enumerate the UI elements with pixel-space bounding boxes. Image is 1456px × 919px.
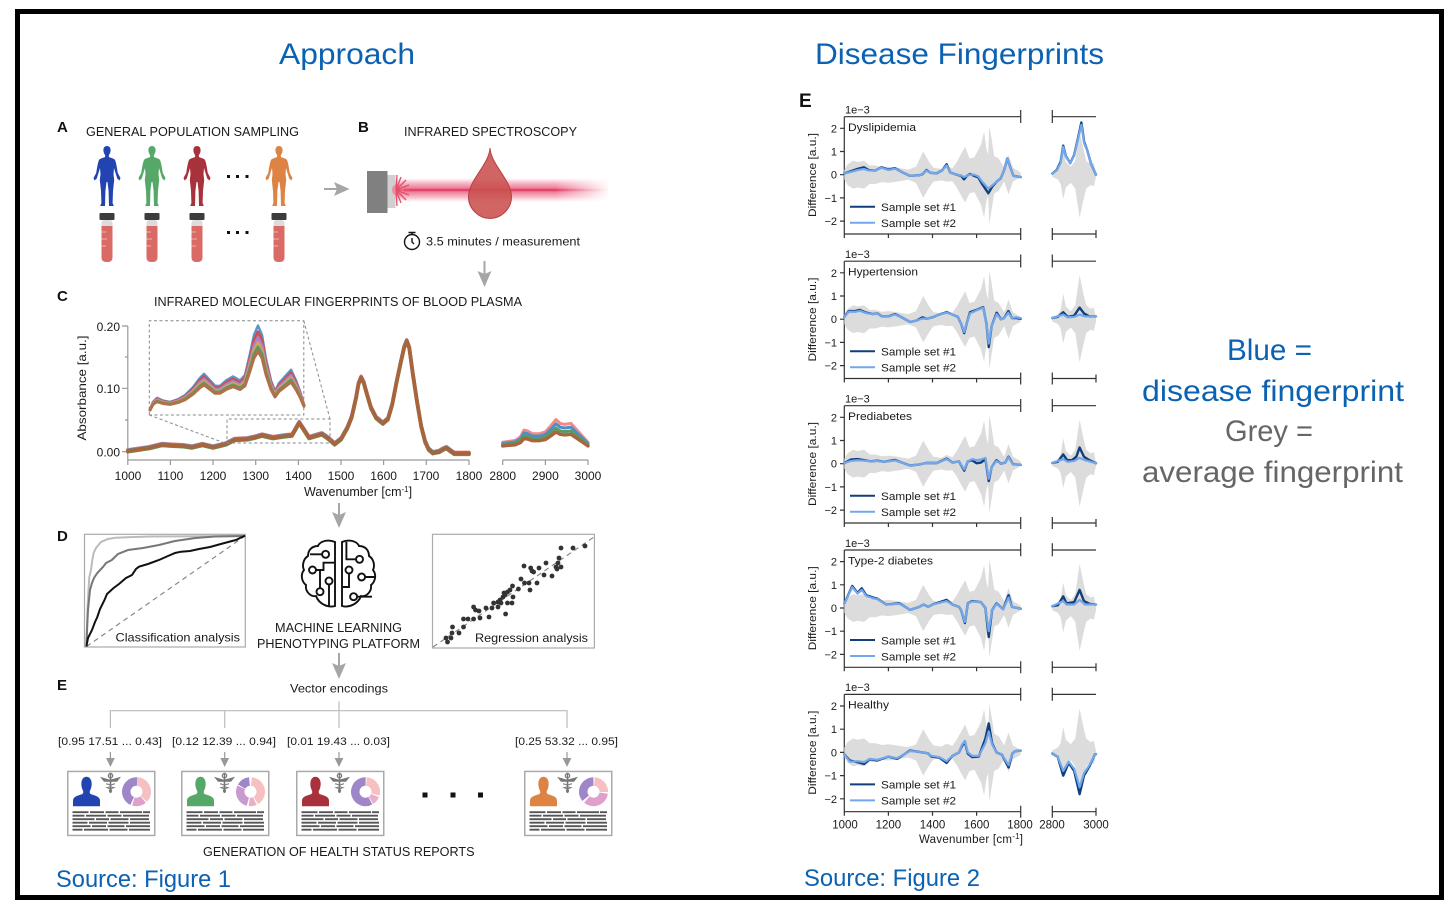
spectrum curves, 1000-1800: [128, 340, 469, 454]
chart: Healthy: 1e−3: [845, 682, 870, 694]
grey meaning: average fingerprint: [1142, 456, 1404, 489]
icon: blood tube 1: [100, 213, 114, 262]
x axis labels, right figure: 3000: [1083, 820, 1109, 832]
chart: Dyslipidemia: 0: [831, 170, 837, 182]
chart: Prediabetes: 0: [831, 459, 837, 471]
heading C: INFRARED MOLECULAR FINGERPRINTS OF BLOOD PLASMA: [154, 295, 523, 309]
panel letter B: B: [358, 119, 369, 136]
panel letter A: A: [57, 119, 68, 136]
icon: blood tube 4: [272, 213, 286, 262]
icon: blood drop: [468, 148, 512, 218]
title: Approach: Approach: [279, 38, 415, 71]
y axis labels: 0.00: [97, 446, 120, 460]
chart: Type-2 diabetes: [807, 538, 1096, 673]
platform label: MACHINE LEARNING: [275, 621, 402, 635]
chart: Prediabetes: 2: [831, 412, 837, 424]
measurement time: 3.5 minutes / measurement: [426, 234, 581, 248]
chart: Prediabetes: −1: [824, 482, 837, 494]
chart: Prediabetes: 1e−3: [845, 394, 870, 406]
x axis title: -1: [401, 485, 409, 494]
icon: laser sparks: [392, 175, 410, 206]
icon: stopwatch: [404, 232, 420, 250]
chart: Type-2 diabetes: 0: [831, 603, 837, 615]
x axis title: ]: [409, 485, 412, 499]
chart: Healthy: −1: [824, 771, 837, 783]
vector values: [0.12 12.39 ... 0.94]: [172, 736, 276, 748]
chart: Prediabetes: −2: [824, 505, 837, 517]
chart: Type-2 diabetes: 1e−3: [845, 538, 870, 550]
title: Disease Fingerprints: Disease Fingerprints: [815, 38, 1104, 71]
chart: Type-2 diabetes: Type-2 diabetes: [848, 555, 934, 567]
chart: Type-2 diabetes: −2: [824, 649, 837, 661]
regression scatter chart: [432, 534, 594, 648]
chart: Healthy: Sample set #2: [881, 796, 956, 808]
chart: Healthy: Healthy: [848, 700, 890, 712]
x axis labels, right figure: 2800: [1039, 820, 1065, 832]
blue label: Blue =: [1227, 334, 1312, 367]
chart: Healthy: −2: [824, 794, 837, 806]
panel E: vector encodings and reports: [57, 677, 618, 859]
x axis labels, right figure: 1000: [832, 820, 858, 832]
x axis labels: 2900: [532, 469, 559, 483]
chart: Type-2 diabetes: 1: [831, 580, 837, 592]
chart: Hypertension: −1: [824, 337, 837, 349]
chart: Prediabetes: [807, 394, 1096, 529]
icon: green person: [138, 146, 166, 206]
vector values: [0.95 17.51 ... 0.43]: [58, 736, 162, 748]
chart: Hypertension: Hypertension: [848, 266, 918, 278]
chart: Healthy: [807, 682, 1096, 818]
continuation dots: [227, 175, 248, 178]
chart: Dyslipidemia: −2: [824, 216, 837, 228]
y axis labels: [97, 320, 120, 460]
chart: Hypertension: −2: [824, 361, 837, 373]
chart: Dyslipidemia: Difference [a.u.]: [807, 133, 819, 217]
small arrows: [106, 752, 571, 767]
heading B: INFRARED SPECTROSCOPY: [404, 125, 578, 139]
continuation dots: [227, 231, 248, 234]
chart: Healthy: 2: [831, 701, 837, 713]
source: figure 1: Source: Figure 1: [56, 866, 231, 893]
panel letter E, right figure: E: [799, 91, 812, 112]
source: figure 2: Source: Figure 2: [804, 865, 980, 892]
chart: Healthy: 0: [831, 747, 837, 759]
panel A: general population sampling: [57, 119, 299, 262]
panel B: infrared spectroscopy: [358, 119, 610, 250]
chart: Hypertension: [807, 249, 1096, 384]
chart: Hypertension: 1e−3: [845, 249, 870, 261]
panel letter C: C: [57, 288, 68, 305]
report card: orange: [525, 771, 612, 835]
x axis title, right figure: -1: [1012, 832, 1020, 841]
blue meaning: disease fingerprint: [1142, 375, 1405, 408]
panel D: machine learning: [57, 528, 594, 651]
icon: orange person: [266, 146, 292, 206]
chart: Dyslipidemia: Sample set #2: [881, 218, 956, 230]
x axis labels: 1200: [200, 469, 227, 483]
platform label: [257, 621, 420, 651]
icon: laser source: [367, 171, 396, 213]
spectrum curves, 2800-3000: [503, 420, 588, 446]
icon: red person: [184, 146, 210, 206]
chart: Prediabetes: Prediabetes: [848, 411, 913, 423]
chart: Type-2 diabetes: Sample set #2: [881, 651, 956, 663]
chart: Hypertension: Sample set #1: [881, 346, 956, 358]
chart: Prediabetes: 1: [831, 436, 837, 448]
chart: Dyslipidemia: 2: [831, 123, 837, 135]
icon: blood tube 2: [144, 213, 160, 262]
x axis title, right figure: ]: [1020, 834, 1023, 846]
chart label: Classification analysis: [116, 630, 240, 644]
x axis labels: 3000: [575, 469, 602, 483]
chart: Dyslipidemia: 1: [831, 146, 837, 158]
chart: Type-2 diabetes: Sample set #1: [881, 635, 956, 647]
x axis labels: 1800: [456, 469, 483, 483]
chart: Dyslipidemia: Sample set #1: [881, 202, 956, 214]
report card: red: [297, 771, 384, 835]
chart: Prediabetes: Difference [a.u.]: [807, 422, 819, 506]
axes: [122, 326, 588, 465]
platform label: PHENOTYPING PLATFORM: [257, 637, 420, 651]
ellipsis between reports: [422, 792, 483, 798]
vector encodings label: Vector encodings: [290, 682, 388, 696]
chart: Type-2 diabetes: 2: [831, 557, 837, 569]
branching tree: [110, 702, 567, 728]
x axis labels, right figure: 1800: [1007, 820, 1033, 832]
chart: Healthy: Sample set #1: [881, 780, 956, 792]
chart: Dyslipidemia: [807, 104, 1096, 240]
panel letter D: D: [57, 528, 68, 545]
x axis labels, right figure: [832, 820, 1109, 832]
chart: Type-2 diabetes: −1: [824, 626, 837, 638]
chart: Prediabetes: Sample set #1: [881, 491, 956, 503]
x axis labels: 1500: [328, 469, 355, 483]
x axis labels: [115, 469, 602, 483]
icon: machine learning brain: [302, 541, 375, 607]
x axis labels: 1700: [413, 469, 440, 483]
heading A: GENERAL POPULATION SAMPLING: [86, 125, 299, 139]
chart: Hypertension: 0: [831, 314, 837, 326]
reports caption: GENERATION OF HEALTH STATUS REPORTS: [203, 845, 474, 859]
x axis labels: 1300: [242, 469, 269, 483]
chart: Dyslipidemia: 1e−3: [845, 104, 870, 116]
vector values: [58, 736, 618, 748]
chart: Dyslipidemia: −1: [824, 193, 837, 205]
legend text block: [1142, 334, 1405, 489]
y axis labels: 0.20: [97, 320, 120, 334]
chart: Dyslipidemia: Dyslipidemia: [848, 122, 917, 134]
chart: Healthy: Difference [a.u.]: [807, 711, 819, 795]
chart: Type-2 diabetes: Difference [a.u.]: [807, 566, 819, 650]
vector values: [0.25 53.32 ... 0.95]: [515, 736, 618, 748]
report card: blue: [68, 771, 155, 835]
x axis title, right figure: Wavenumber [cm: [919, 834, 1012, 846]
x axis labels: 1100: [157, 469, 184, 483]
x axis labels: 2800: [489, 469, 516, 483]
y axis labels: 0.10: [97, 382, 120, 396]
chart: Hypertension: Sample set #2: [881, 362, 956, 374]
icon: blood tube 3: [190, 213, 204, 262]
x axis labels, right figure: 1600: [964, 820, 989, 832]
laser beam: [395, 176, 610, 204]
panel C: molecular fingerprints chart: [57, 288, 602, 499]
chart: Prediabetes: Sample set #2: [881, 507, 956, 519]
panel letter E: E: [57, 677, 67, 694]
chart: Hypertension: Difference [a.u.]: [807, 278, 819, 362]
icon: blue person: [94, 146, 120, 206]
vector values: [0.01 19.43 ... 0.03]: [287, 736, 390, 748]
chart: Hypertension: 1: [831, 291, 837, 303]
x axis labels: 1000: [115, 469, 142, 483]
classification ROC chart: [84, 534, 245, 647]
grey label: Grey =: [1225, 415, 1313, 448]
chart label: Regression analysis: [475, 631, 588, 645]
arrow: D to E: [332, 653, 346, 679]
x axis labels, right figure: 1400: [920, 820, 945, 832]
x axis labels: 1600: [370, 469, 397, 483]
report card: green: [182, 771, 269, 835]
x axis labels: 1400: [285, 469, 312, 483]
arrow: C to D: [332, 503, 346, 528]
arrow: A to B: [324, 182, 350, 196]
chart: Healthy: 1: [831, 724, 837, 736]
inset curves: [150, 326, 304, 410]
x axis labels, right figure: 1200: [876, 820, 901, 832]
chart: Hypertension: 2: [831, 268, 837, 280]
x axis title: Wavenumber [cm: [304, 485, 401, 499]
inset zoom box: [149, 321, 330, 443]
arrow: B to C: [478, 261, 492, 287]
y axis title: Absorbance [a.u.]: [75, 335, 89, 441]
